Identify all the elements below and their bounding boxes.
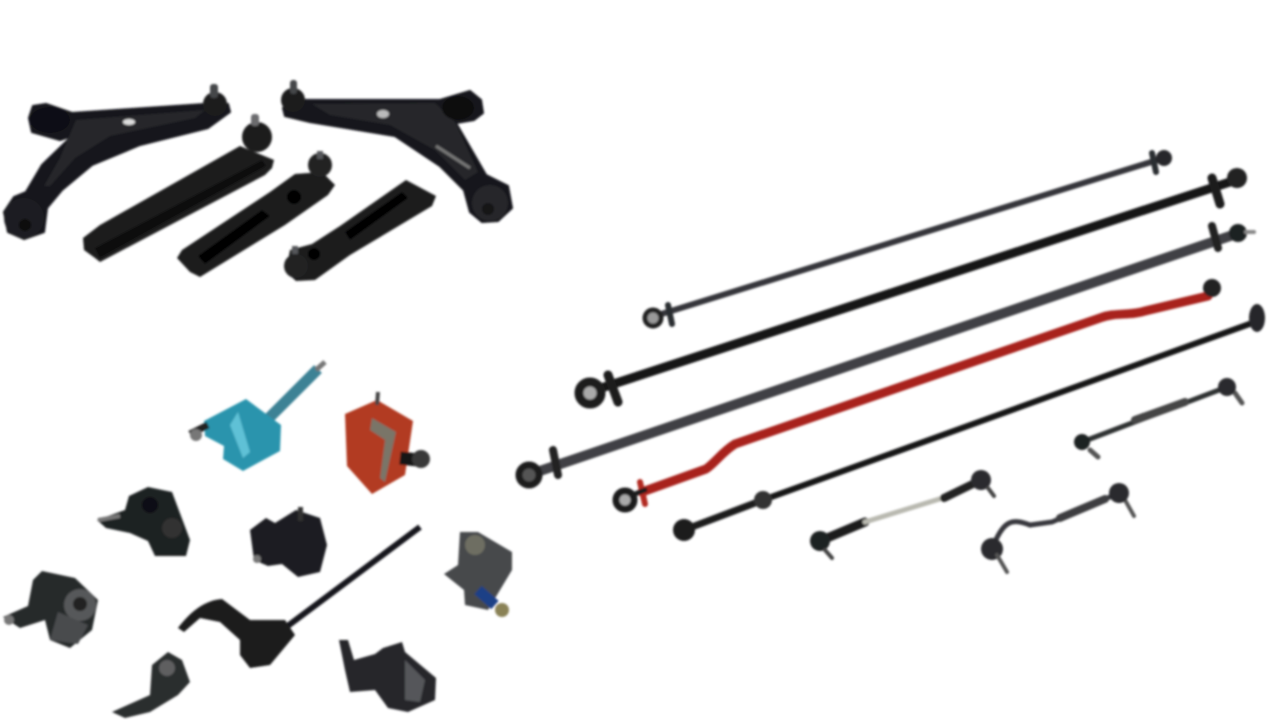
steering box: black upper left	[97, 487, 190, 556]
steering box: bottom right	[339, 640, 436, 712]
rod 3: thick grey	[519, 224, 1254, 485]
rod 2: thick black	[579, 168, 1247, 404]
rod 8: short curved	[981, 483, 1134, 572]
steering box: black centre	[250, 507, 327, 577]
steering box: small bottom left	[112, 652, 190, 718]
steering box: grey lower left	[3, 571, 98, 648]
rod 6: short upper	[1074, 378, 1242, 457]
control arm: large left	[4, 84, 230, 239]
tie rods group	[519, 150, 1265, 572]
rod 1: thin dark grey	[645, 150, 1172, 326]
control arm: slotted right	[284, 180, 436, 281]
steering box: grey right with blue nut	[444, 532, 512, 617]
control arms group	[4, 80, 512, 281]
control arm: slotted middle	[177, 151, 335, 277]
rod 7: short with silver centre	[810, 470, 994, 558]
steering gear boxes group	[3, 362, 512, 718]
steering box: red	[345, 392, 430, 494]
control arm: straight long	[83, 114, 274, 262]
steering box: blue	[190, 362, 325, 471]
steering box: long shaft	[178, 527, 420, 668]
control arm: large right	[281, 80, 512, 222]
rod 5: black with joint	[673, 304, 1265, 541]
rod 4: red drag link	[616, 279, 1221, 509]
